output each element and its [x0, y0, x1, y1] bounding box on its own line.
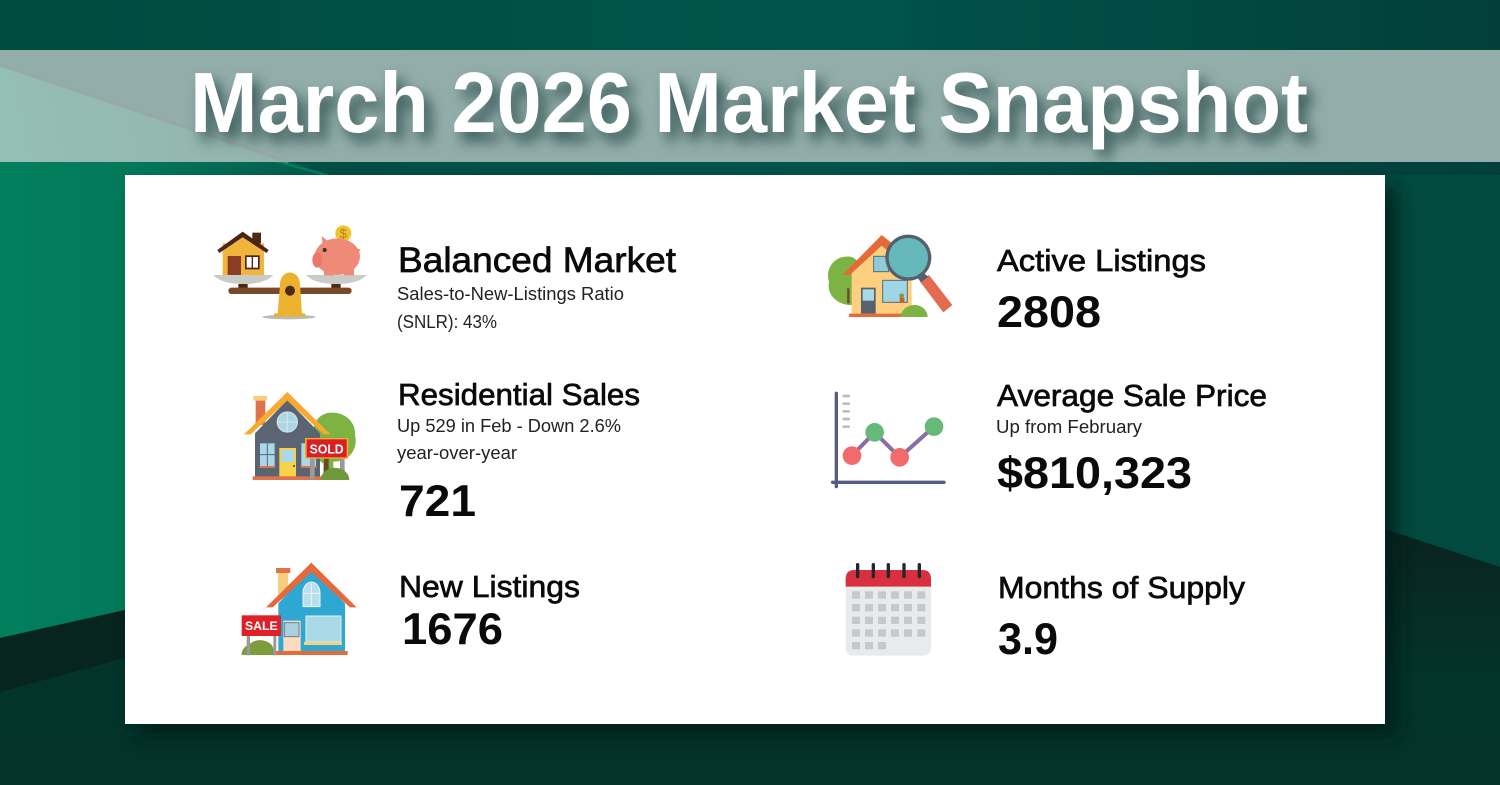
- heading: Months of Supply: Months of Supply: [998, 570, 1246, 605]
- icon: house for sale: [242, 563, 357, 655]
- text: price change: Up from February: [996, 417, 1142, 437]
- icon: calendar: [846, 565, 931, 656]
- value: $810,323: $810,323: [997, 449, 1192, 498]
- title band: [0, 50, 1500, 162]
- heading: Balanced Market: Balanced Market: [398, 241, 676, 280]
- card shadow: [137, 187, 1397, 736]
- text: SNLR line one: Sales-to-New-Listings Ratio: [397, 284, 624, 304]
- heading: Residential Sales: Residential Sales: [398, 377, 640, 412]
- heading: New Listings: New Listings: [399, 569, 580, 604]
- value: 2808: 2808: [997, 288, 1101, 337]
- icon: house for sale: SALE: [245, 619, 278, 633]
- icon: house with magnifying glass: [828, 235, 952, 317]
- value: 3.9: 3.9: [998, 615, 1058, 664]
- text: SNLR line two: (SNLR): 43%: [397, 312, 497, 332]
- text: sales change line one: Up 529 in Feb - Down 2.6%: [397, 416, 621, 436]
- icon: house and piggy bank on scale: $: [340, 227, 347, 241]
- heading: Active Listings: Active Listings: [997, 243, 1206, 278]
- icon: sold house: [244, 392, 356, 480]
- value: 721: 721: [399, 477, 476, 526]
- icon: sold house: SOLD: [310, 442, 344, 456]
- value: 1676: 1676: [402, 605, 503, 654]
- heading: Average Sale Price: Average Sale Price: [997, 378, 1267, 413]
- white panel: [125, 175, 1385, 724]
- title: March 2026 Market Snapshot: [190, 56, 1308, 151]
- icon: line chart: [833, 393, 944, 487]
- text: sales change line two: year-over-year: [397, 443, 517, 463]
- icon: house and piggy bank on scale: [213, 225, 367, 319]
